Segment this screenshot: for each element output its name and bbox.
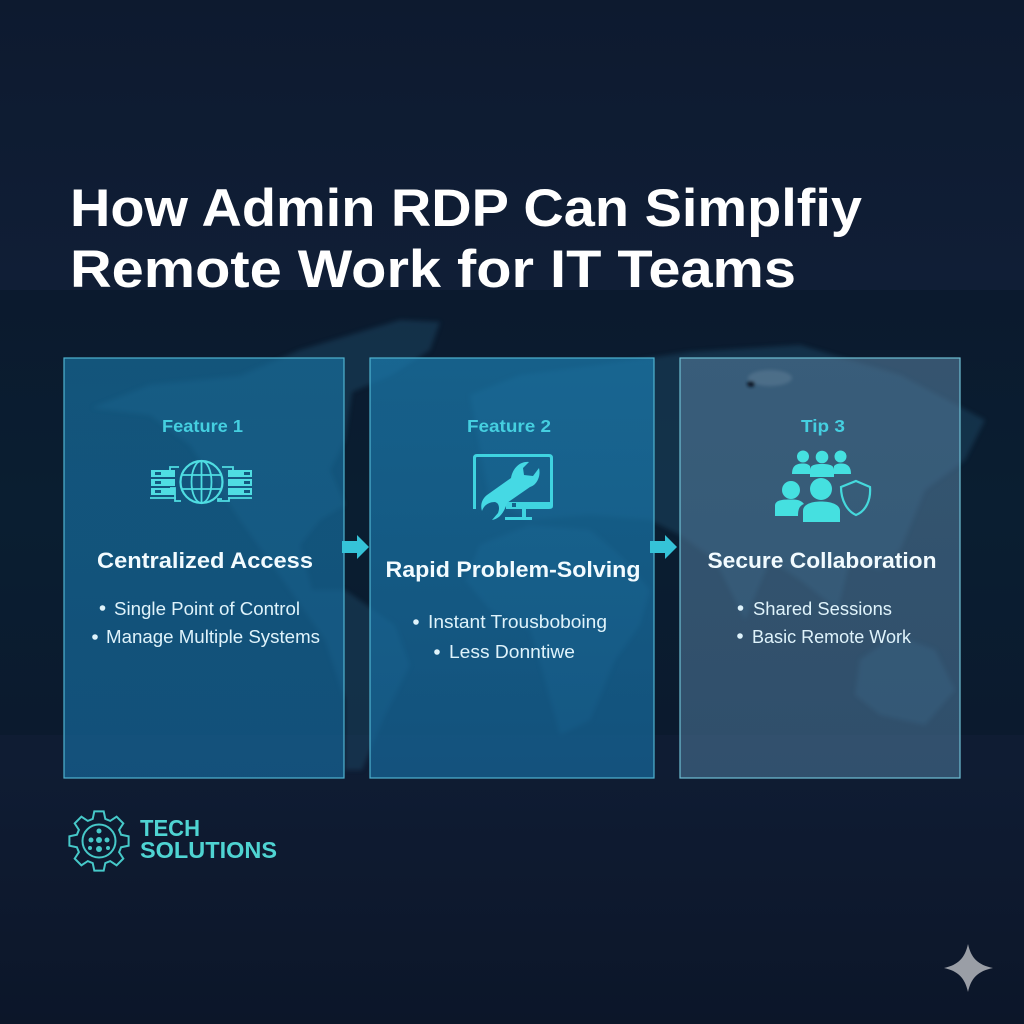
bullet list: Basic Remote Work <box>752 627 912 647</box>
title: How Admin RDP Can Simplfiy <box>70 179 863 238</box>
icon: sparkle watermark <box>944 944 993 992</box>
bullet list: Instant Trousboboing <box>428 612 607 632</box>
arrow: panel 1 to panel 2 <box>342 535 369 559</box>
bullet list <box>92 599 320 647</box>
logo: Tech Solutions <box>69 811 277 871</box>
icon: servers and globe <box>150 461 252 503</box>
bullet list <box>413 612 607 662</box>
label: Feature 1: Feature 1 <box>162 416 243 436</box>
wordmark: TECH <box>140 815 200 841</box>
panel: Rapid Problem-Solving <box>370 358 654 778</box>
label: Feature 2: Feature 2 <box>467 416 551 436</box>
heading: Rapid Problem-Solving: Rapid Problem-Solving <box>386 557 640 582</box>
bullet list: Less Donntiwe <box>449 642 575 662</box>
icon: team with shield <box>775 450 870 522</box>
wordmark: SOLUTIONS <box>140 837 277 863</box>
bullet list: Manage Multiple Systems <box>106 627 320 647</box>
panel: Centralized Access <box>64 358 344 778</box>
bullet list <box>737 599 912 647</box>
wordmark <box>140 815 277 863</box>
title <box>70 179 863 299</box>
heading: Centralized Access: Centralized Access <box>97 548 313 573</box>
bullet list: Shared Sessions <box>753 599 892 619</box>
title: Remote Work for IT Teams <box>70 240 796 299</box>
icon: gear <box>69 811 129 871</box>
icon: monitor and wrench <box>474 456 553 520</box>
label: Tip 3: Tip 3 <box>801 416 845 436</box>
bullet list: Single Point of Control <box>114 599 300 619</box>
arrow: panel 2 to panel 3 <box>650 535 677 559</box>
panel: Secure Collaboration <box>680 358 960 778</box>
heading: Secure Collaboration: Secure Collaboration <box>708 548 936 573</box>
world map <box>92 320 985 770</box>
smudge at top of panel <box>747 370 792 387</box>
